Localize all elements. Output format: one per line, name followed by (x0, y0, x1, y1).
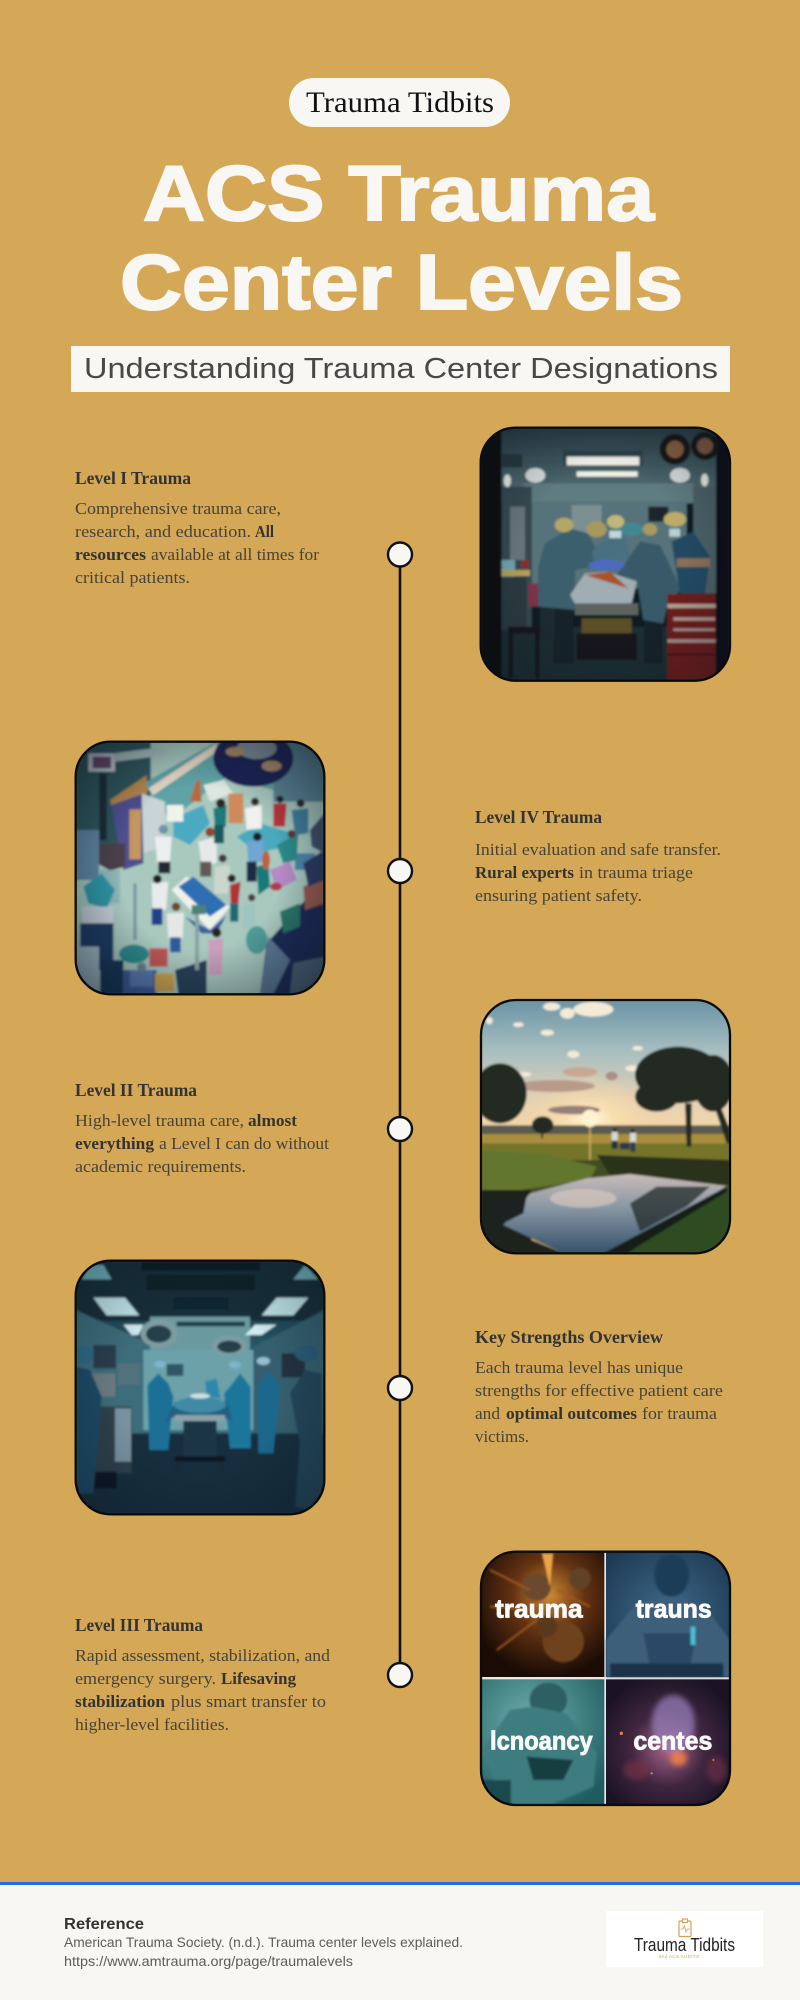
text block: Key Strengths Overview: Each trauma level has unique (475, 1358, 683, 1377)
text block: Key Strengths Overview: strengths for effective patient care (475, 1381, 723, 1400)
text block: Key Strengths Overview: for trauma (642, 1404, 717, 1423)
text block: Level II Trauma: Level II Trauma (75, 1080, 197, 1100)
text block: Level IV Trauma: Level IV Trauma (475, 807, 602, 827)
text block: Level II Trauma: a Level I can do without (159, 1134, 329, 1153)
text block: Level II Trauma: academic requirements. (75, 1157, 246, 1176)
title: ACS Trauma (143, 149, 655, 237)
image: operating room with surgical team (75, 1261, 324, 1514)
subtitle banner (71, 346, 730, 392)
text block: Level I Trauma (75, 468, 319, 587)
text block: Level IV Trauma: ensuring patient safety. (475, 886, 642, 905)
collage panel: lcnoancy: lcnoancy (490, 1725, 593, 1755)
image: illustrated busy trauma unit (76, 730, 324, 994)
logo: Trauma Tidbits (634, 1935, 735, 1955)
badge: Trauma Tidbits: Trauma Tidbits (306, 86, 494, 119)
badge: Trauma Tidbits (289, 78, 510, 127)
collage panel: trauma (481, 1552, 604, 1677)
text block: Level II Trauma (75, 1080, 329, 1176)
logo (606, 1911, 763, 1967)
logo: and ACS AUDITS (659, 1954, 699, 1959)
text block: Key Strengths Overview (475, 1327, 723, 1446)
text block: Level I Trauma: Comprehensive trauma care, (75, 499, 281, 518)
collage panel: trauma: trauma (495, 1593, 583, 1623)
title (120, 149, 683, 326)
timeline (388, 542, 412, 1687)
reference text: https://www.amtrauma.org/page/traumalevels (64, 1953, 353, 1969)
reference text: Reference (64, 1916, 144, 1933)
text block: Level I Trauma: research, and education. (75, 522, 251, 541)
reference text: American Trauma Society. (n.d.). Trauma center levels explained. (64, 1934, 463, 1950)
text block: Key Strengths Overview: victims. (475, 1427, 529, 1446)
image: rural field at sunset (473, 1000, 733, 1253)
footer (0, 1882, 800, 2000)
text block: Level III Trauma (75, 1615, 331, 1734)
collage panel: trauns (606, 1552, 730, 1677)
text block: Level III Trauma: plus smart transfer to (171, 1692, 326, 1711)
text block: Level III Trauma: Level III Trauma (75, 1615, 203, 1635)
text block: Level II Trauma: almost (248, 1111, 297, 1130)
collage panel: lcnoancy (481, 1679, 604, 1805)
collage panel: trauns: trauns (636, 1593, 712, 1623)
text block: Level IV Trauma: Initial evaluation and safe transfer. (475, 840, 721, 859)
collage panel: centes: centes (633, 1725, 712, 1755)
text block: Level II Trauma: High-level trauma care, (75, 1111, 244, 1130)
text block: Level I Trauma: Level I Trauma (75, 468, 191, 488)
text block: Level IV Trauma (475, 807, 721, 905)
image: trauma team in a resuscitation bay (481, 428, 730, 682)
text block: Level III Trauma: emergency surgery. (75, 1669, 216, 1688)
image: four-panel trauma collage (481, 1552, 730, 1805)
text block: Key Strengths Overview: Key Strengths Overview (475, 1327, 663, 1347)
text block: Level IV Trauma: Rural experts (475, 863, 574, 882)
text block: Level I Trauma: available at all times for (151, 545, 319, 564)
text block: Level III Trauma: Lifesaving (221, 1669, 296, 1688)
text block: Level I Trauma: resources (75, 545, 146, 564)
text block: Level III Trauma: higher-level facilities. (75, 1715, 229, 1734)
text block: Level I Trauma: critical patients. (75, 568, 190, 587)
title: Center Levels (120, 238, 683, 326)
text block: Level III Trauma: stabilization (75, 1692, 166, 1711)
collage panel: centes (606, 1679, 730, 1805)
text block: Level I Trauma: All (255, 522, 274, 541)
subtitle banner: Understanding Trauma Center Designations (84, 353, 718, 385)
text block: Level III Trauma: Rapid assessment, stabilization, and (75, 1646, 331, 1665)
text block: Level IV Trauma: in trauma triage (579, 863, 693, 882)
text block: Key Strengths Overview: and (475, 1404, 501, 1423)
text block: Key Strengths Overview: optimal outcomes (506, 1404, 637, 1423)
reference text (64, 1916, 463, 1969)
text block: Level II Trauma: everything (75, 1134, 155, 1153)
